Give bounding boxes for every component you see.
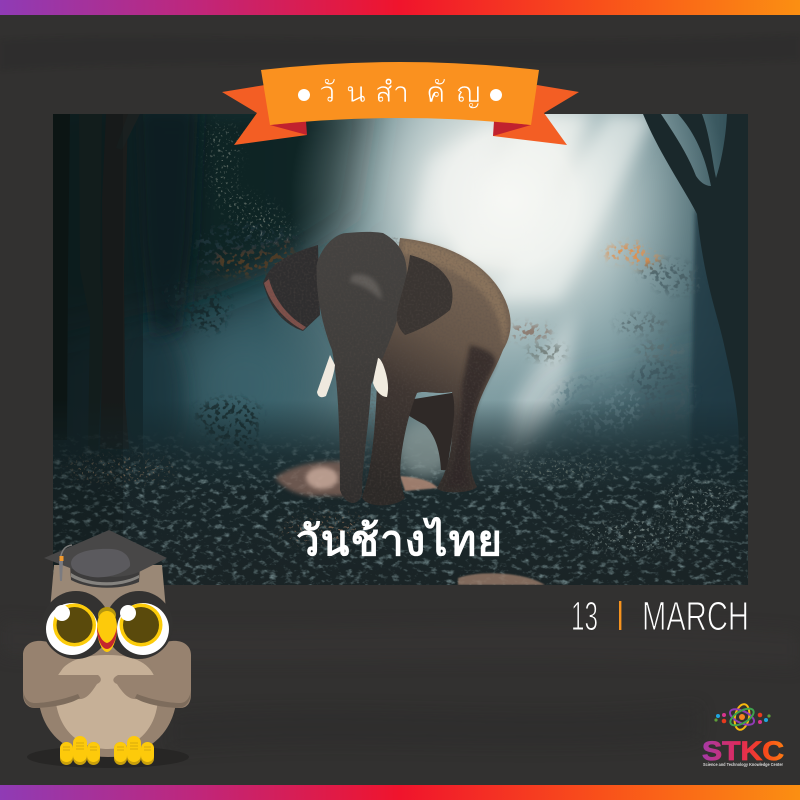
photo: elephant in misty forest xyxy=(30,90,760,585)
ground xyxy=(53,400,748,585)
logo dots xyxy=(714,713,771,724)
banner: วันสำคัญ xyxy=(222,62,579,145)
right ear xyxy=(397,255,453,335)
head xyxy=(50,565,166,670)
bottom gradient bar xyxy=(0,785,800,800)
left arm shadow xyxy=(23,690,80,708)
banner text: ญ xyxy=(456,77,481,109)
banner text: วั xyxy=(319,77,335,109)
background left trees xyxy=(53,114,190,449)
top gradient bar xyxy=(0,0,800,15)
left glasses eye xyxy=(42,591,110,659)
skin texture xyxy=(263,232,515,508)
sunlit ground patches xyxy=(65,459,735,553)
left ear xyxy=(263,245,320,331)
ear pink edge xyxy=(264,279,306,330)
atom icon xyxy=(728,703,756,731)
path glow xyxy=(275,461,345,496)
owl mascot xyxy=(23,530,191,768)
banner text: สำ xyxy=(375,77,409,109)
day: 13 xyxy=(571,593,598,639)
elephant xyxy=(263,232,515,508)
canopy light speckle xyxy=(205,125,300,240)
body and near legs xyxy=(362,238,511,505)
body xyxy=(38,650,177,757)
banner text: คั xyxy=(426,77,445,109)
logo wordmark: STKC xyxy=(702,736,784,766)
rear shading xyxy=(454,344,498,478)
light rays xyxy=(410,114,655,480)
far hind leg xyxy=(409,392,454,470)
mist between legs xyxy=(393,418,457,478)
right ribbon tail xyxy=(493,85,579,145)
beak xyxy=(97,607,117,652)
month: MARCH xyxy=(642,593,749,639)
banner text: น xyxy=(346,77,366,109)
light glow xyxy=(298,114,716,394)
right fold xyxy=(493,121,531,136)
date: 13 | March xyxy=(571,593,749,639)
bullet right xyxy=(490,89,502,101)
darker lower mist xyxy=(532,359,694,458)
forehead highlight xyxy=(350,274,382,300)
right foot xyxy=(114,736,154,765)
head and trunk xyxy=(317,232,407,503)
misty branches on right xyxy=(508,261,700,435)
right glasses eye xyxy=(105,591,173,659)
vignette on left edge xyxy=(53,440,123,572)
back highlight xyxy=(402,240,508,348)
left foot xyxy=(60,736,100,765)
left arm xyxy=(23,641,101,708)
left ribbon tail xyxy=(222,85,307,145)
left foliage clumps xyxy=(175,224,296,450)
belly xyxy=(55,655,158,749)
right tusk xyxy=(373,358,388,397)
right arm xyxy=(113,641,191,708)
left tusk xyxy=(317,355,335,397)
graduation cap xyxy=(44,530,167,588)
right arm shadow xyxy=(135,690,191,708)
orange leaves on right xyxy=(605,243,660,268)
divider xyxy=(619,601,621,630)
STKC logo xyxy=(702,703,784,767)
forest base xyxy=(68,114,727,484)
right tree xyxy=(643,114,748,480)
ribbon body xyxy=(261,62,539,125)
dark canopy xyxy=(104,114,394,326)
left fold xyxy=(270,121,307,135)
mist pool xyxy=(184,324,284,430)
bullet left xyxy=(298,89,310,101)
logo tagline: Science and Technology Knowledge Center xyxy=(703,762,783,767)
shadow xyxy=(27,746,189,768)
ground foliage texture xyxy=(53,430,748,585)
title: วันช้างไทย: วันช้างไทย xyxy=(296,516,502,564)
